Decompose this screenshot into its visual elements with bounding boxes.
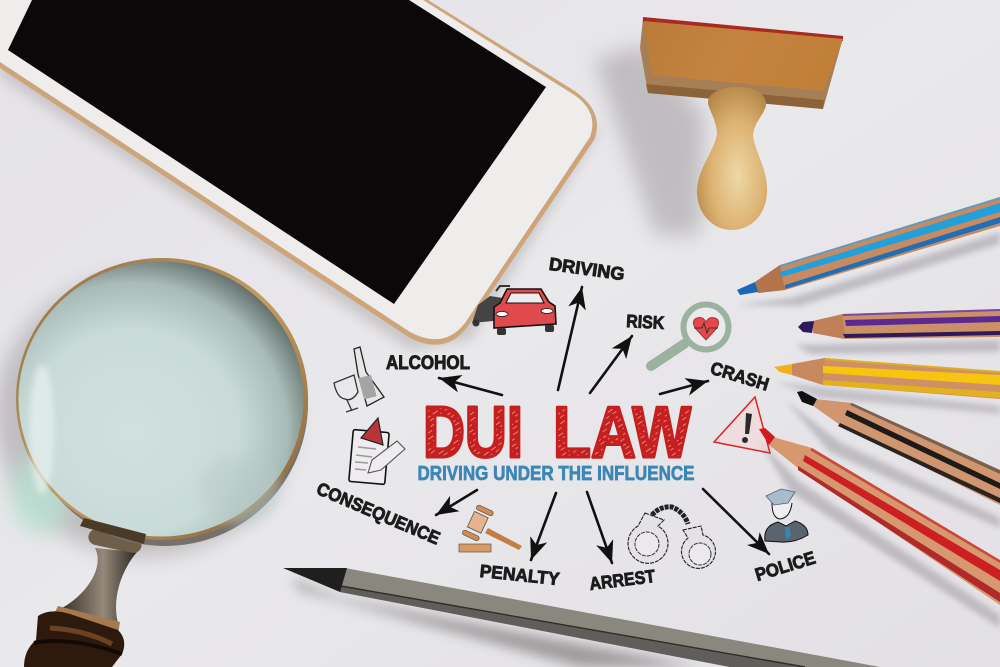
icon: gavel [459,504,522,552]
red pencil [759,428,1000,628]
stamp knob [697,87,767,230]
label: arrest: ARREST [588,566,656,594]
pencil [368,441,405,473]
red warning triangle [361,418,383,445]
mint light glow [10,455,70,535]
pencil lead [283,568,347,592]
magnifying glass [0,258,308,667]
red car [494,289,556,328]
right cuff [681,526,715,568]
wooden stamp [595,17,843,235]
label: driving: DRIVING [548,254,626,284]
label: crash: CRASH [708,358,771,395]
label: penalty: PENALTY [479,561,560,589]
icon: cars [472,286,556,335]
magnifier lens [18,262,304,536]
phone white face [0,0,592,339]
icon: police officer [765,489,808,542]
arrow: penalty [531,493,556,560]
icon: bottle and glass [334,347,384,412]
arrow: crash [660,381,708,394]
blue pencil [735,197,1000,306]
label: alcohol: ALCOHOL [386,353,470,374]
magnifier metal rim side [22,260,308,546]
magnifier handle [24,528,143,667]
left cuff [628,513,668,563]
pencil body [340,568,880,667]
stamp block side [640,18,843,109]
title: DUI LAW: DUI [423,393,523,473]
icon: warning triangle [714,397,770,453]
arrow: alcohol [439,378,502,395]
heart [693,318,719,340]
stamp block top [644,21,843,91]
stamp rubber edge [643,17,843,41]
title: DUI LAW: LAW [553,393,691,473]
title: DUI LAW [423,393,691,473]
icon: handcuffs [628,507,715,568]
phone gold frame [0,0,597,345]
magnifier collar [80,518,146,544]
grey pencil [283,568,880,667]
yellow pencil [774,358,1000,414]
label: risk: RISK [626,311,665,333]
arrow: police [703,489,769,554]
purple pencil [796,309,1000,354]
label: consequence: CONSEQUENCE [314,478,443,548]
magnifier gold ring [16,258,308,540]
arrow: driving [558,287,582,390]
icon: heart magnifier [651,304,728,366]
icon: clipboard [349,418,405,484]
arrow: arrest [587,492,612,563]
arrow: consequence [436,490,477,515]
label: police: POLICE [753,548,818,585]
black pencil [785,391,1000,528]
phone [0,0,600,350]
phone black screen [8,0,546,304]
arrow: risk [590,336,632,393]
subtitle: DRIVING UNDER THE INFLUENCE [418,463,694,485]
